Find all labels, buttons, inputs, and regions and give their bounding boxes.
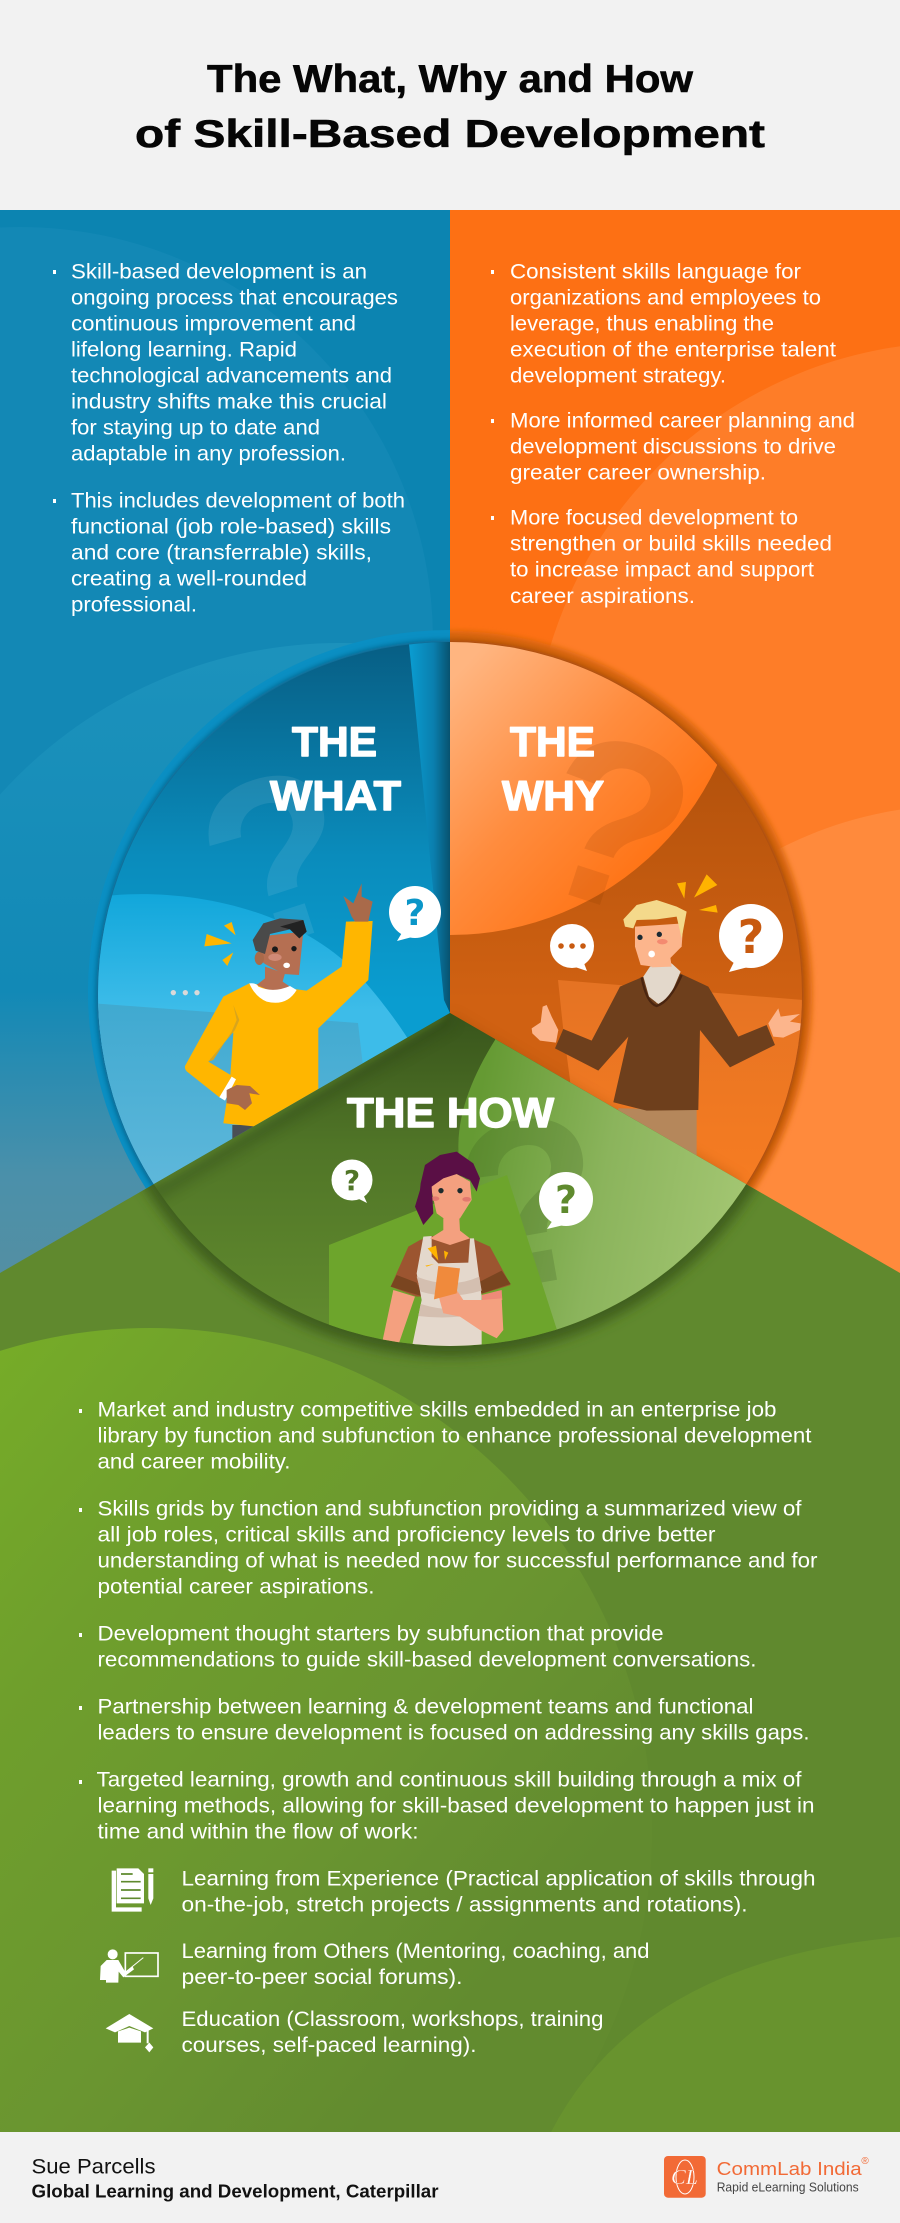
text block: why bullets: organizations and employees to [510,286,821,310]
text block: what bullets: Skill-based development is an [71,260,367,283]
speech bubble: dots [550,924,594,971]
text block: how bullets: recommendations to guide skill-based development conversations. [98,1649,756,1672]
text block: author: Global Learning and Development, Caterpillar [32,2182,438,2202]
text block: why bullets: leverage, thus enabling the [510,313,774,336]
text block: why bullets: More focused development to [510,506,798,530]
heading: the why: WHY [502,772,604,819]
text block: why bullets: development strategy. [510,364,726,387]
heading: the what: THE [292,718,377,765]
text block: why bullets: strengthen or build skills needed [510,533,832,556]
text block: what bullets: continuous improvement and [71,313,356,336]
text block: how bullets: leaders to ensure development is focused on addressing any skills gaps. [98,1722,809,1745]
text block: why bullets: Consistent skills language for [510,260,801,283]
text block: why bullets: execution of the enterprise talent [510,338,836,361]
character: man in yellow sweater [171,883,373,1160]
icon: document and pencil [112,1868,153,1912]
text block: what bullets: ongoing process that encourages [71,286,398,310]
heading: the why [502,718,604,819]
heading: the what: WHAT [270,772,401,819]
icon: teacher at board [100,1949,158,1983]
icon: background question mark what: ? [169,712,387,1006]
pie slice: the why [450,642,802,1184]
speech bubble: question left [332,1160,372,1203]
pie slice: the what [98,642,450,1184]
panel: the why background [450,210,900,1273]
text block: author [32,2155,438,2202]
speech bubble: question blue: ? [405,893,425,934]
heading: the what [270,718,401,819]
text block: what bullets: This includes development of both [71,489,405,512]
text block: learning from others: Learning from Others (Mentoring, coaching, and [182,1940,650,1963]
text block: what bullets: creating a well-rounded [71,567,307,590]
text block: how bullets: Market and industry competitive skills embedded in an enterprise job [98,1399,776,1422]
header band [0,0,900,210]
speech bubble: question right: ? [555,1178,577,1222]
logo: commlab india: ® [861,2156,869,2167]
text block: learning from experience [182,1868,816,1917]
text block: why bullets: greater career ownership. [510,462,766,485]
text block: what bullets [53,260,405,616]
logo: commlab india: CommLab India [717,2159,863,2179]
text block: why bullets: More informed career planning and [510,409,855,432]
text block: how bullets: learning methods, allowing for skill-based development to happen just in [98,1795,814,1818]
text block: how bullets: understanding of what is needed now for successful performance and for [98,1549,818,1572]
text block: what bullets: professional. [71,593,197,616]
title: The What, Why and How [207,58,694,101]
text block: why bullets: development discussions to drive [510,436,836,458]
panel: the how background [0,1184,900,2132]
text block: why bullets [491,260,855,608]
text block: education [182,2008,604,2057]
logo: commlab india: CL [671,2165,698,2189]
heading: the why: THE [510,718,595,765]
text block: how bullets: and career mobility. [98,1451,290,1474]
text block: how bullets: Targeted learning, growth and continuous skill building through a mix of [96,1769,802,1792]
text block: author: Sue Parcells [32,2155,156,2178]
text block: how bullets: all job roles, critical skills and proficiency levels to drive better [98,1523,716,1546]
speech bubble: question left: ? [344,1164,360,1197]
character: man in brown sweater [532,874,801,1160]
character: woman with phone [382,1152,511,1348]
speech bubble: question orange [719,904,783,972]
text block: why bullets: career aspirations. [510,585,695,608]
icon: background question mark how: ? [438,1060,625,1344]
footer band [0,2132,900,2223]
text block: education: courses, self-paced learning). [182,2034,476,2057]
text block: how bullets: Partnership between learning & development teams and functional [98,1696,754,1719]
icon: graduation cap [106,2014,153,2052]
panel: the what background [0,210,450,1273]
text block: what bullets: industry shifts make this crucial [71,391,387,414]
title: of Skill-Based Development [135,113,765,156]
text block: education: Education (Classroom, workshops, training [182,2008,604,2031]
speech bubble: question orange: ? [738,910,764,964]
text block: how bullets: library by function and subfunction to enhance professional development [98,1425,812,1448]
text block: how bullets: potential career aspirations. [98,1575,374,1598]
pie slice: the how [154,1013,746,1346]
text block: learning from others: peer-to-peer social forums). [182,1966,462,1989]
text block: why bullets: to increase impact and support [510,559,814,582]
icon: background question mark why: ? [505,677,723,971]
text block: learning from others [182,1940,650,1989]
pie rim [88,630,812,1357]
speech bubble: question blue [389,886,441,941]
text block: what bullets: and core (transferrable) skills, [71,542,372,565]
text block: how bullets: Skills grids by function and subfunction providing a summarized view of [98,1497,802,1520]
text block: learning from experience: on-the-job, stretch projects / assignments and rotations). [182,1894,748,1917]
text block: what bullets: technological advancements and [71,364,392,387]
logo: commlab india: Rapid eLearning Solutions [717,2181,859,2195]
text block: what bullets: lifelong learning. Rapid [71,338,297,361]
text block: what bullets: for staying up to date and [71,417,320,440]
text block: what bullets: adaptable in any profession. [71,442,346,465]
heading: the how: THE HOW [347,1089,554,1136]
text block: how bullets: Development thought starters by subfunction that provide [98,1623,664,1646]
logo: commlab india [664,2156,869,2198]
text block: how bullets [79,1399,818,1844]
text block: how bullets: time and within the flow of work: [98,1821,418,1844]
text block: what bullets: functional (job role-based) skills [71,516,391,538]
title [135,58,765,156]
speech bubble: question right [539,1172,593,1229]
text block: learning from experience: Learning from Experience (Practical application of skills through [182,1868,816,1891]
